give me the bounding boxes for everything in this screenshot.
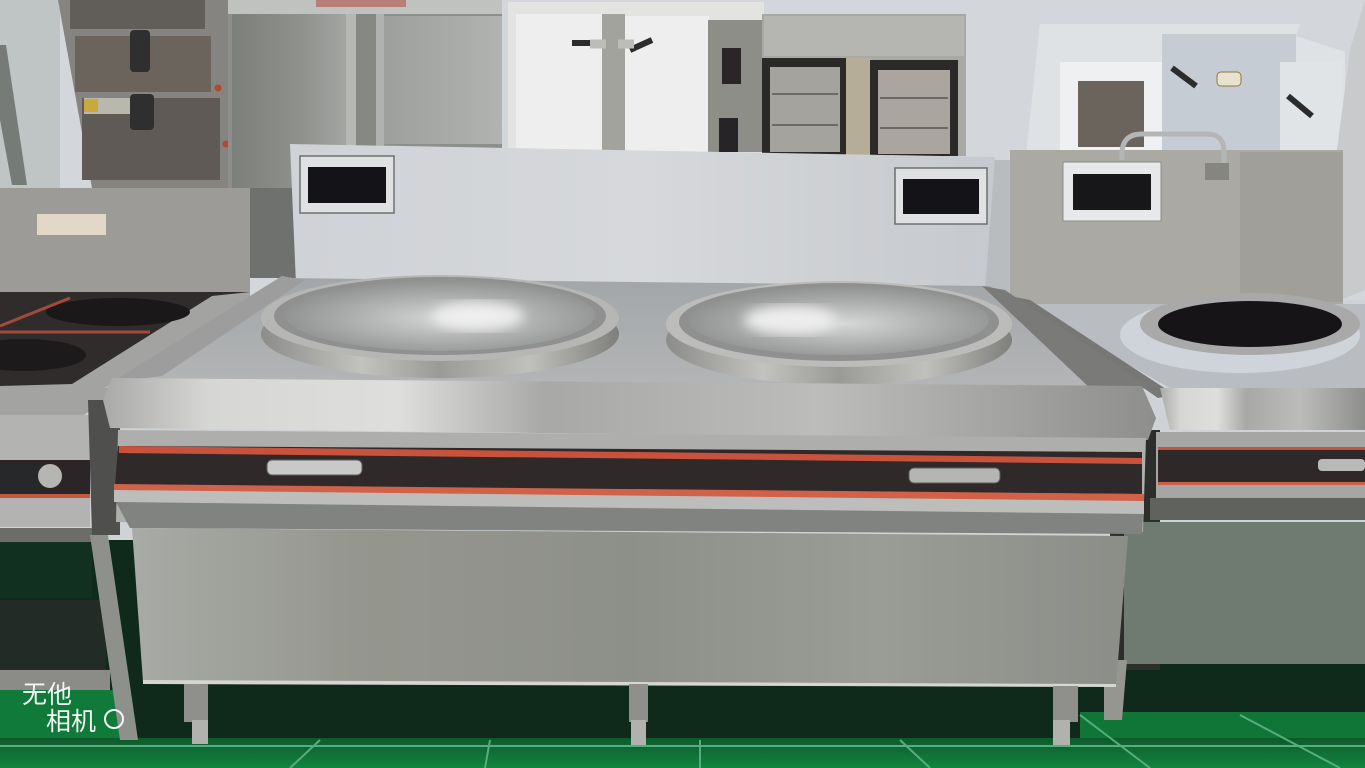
- backsplash panel with display windows: [290, 144, 995, 290]
- camera watermark: [22, 681, 123, 736]
- right wok: [666, 281, 1012, 385]
- glass door cabinet: [762, 14, 966, 156]
- floor: [0, 540, 1365, 768]
- camera watermark: 无他: [22, 681, 72, 709]
- white cabinet with handles: [508, 2, 764, 154]
- tall steel cabinet background: [228, 0, 502, 278]
- right stove: [985, 134, 1365, 720]
- left wok: [261, 275, 619, 378]
- left handle: [267, 460, 362, 475]
- camera watermark: 相机: [46, 708, 96, 736]
- main wok range: [103, 144, 1156, 745]
- left stove body: [0, 188, 250, 740]
- white warming cabinets right: [1026, 24, 1345, 155]
- right handle: [909, 468, 1000, 483]
- drawer oven cabinet background: [58, 0, 242, 188]
- legs: [184, 684, 1078, 745]
- front lip: [103, 378, 1156, 440]
- cooktop surface: [104, 278, 1145, 388]
- back wall: [0, 0, 1365, 300]
- control band: [116, 430, 1146, 532]
- lower drawer front: [132, 528, 1128, 686]
- structural pillar right: [1316, 0, 1365, 310]
